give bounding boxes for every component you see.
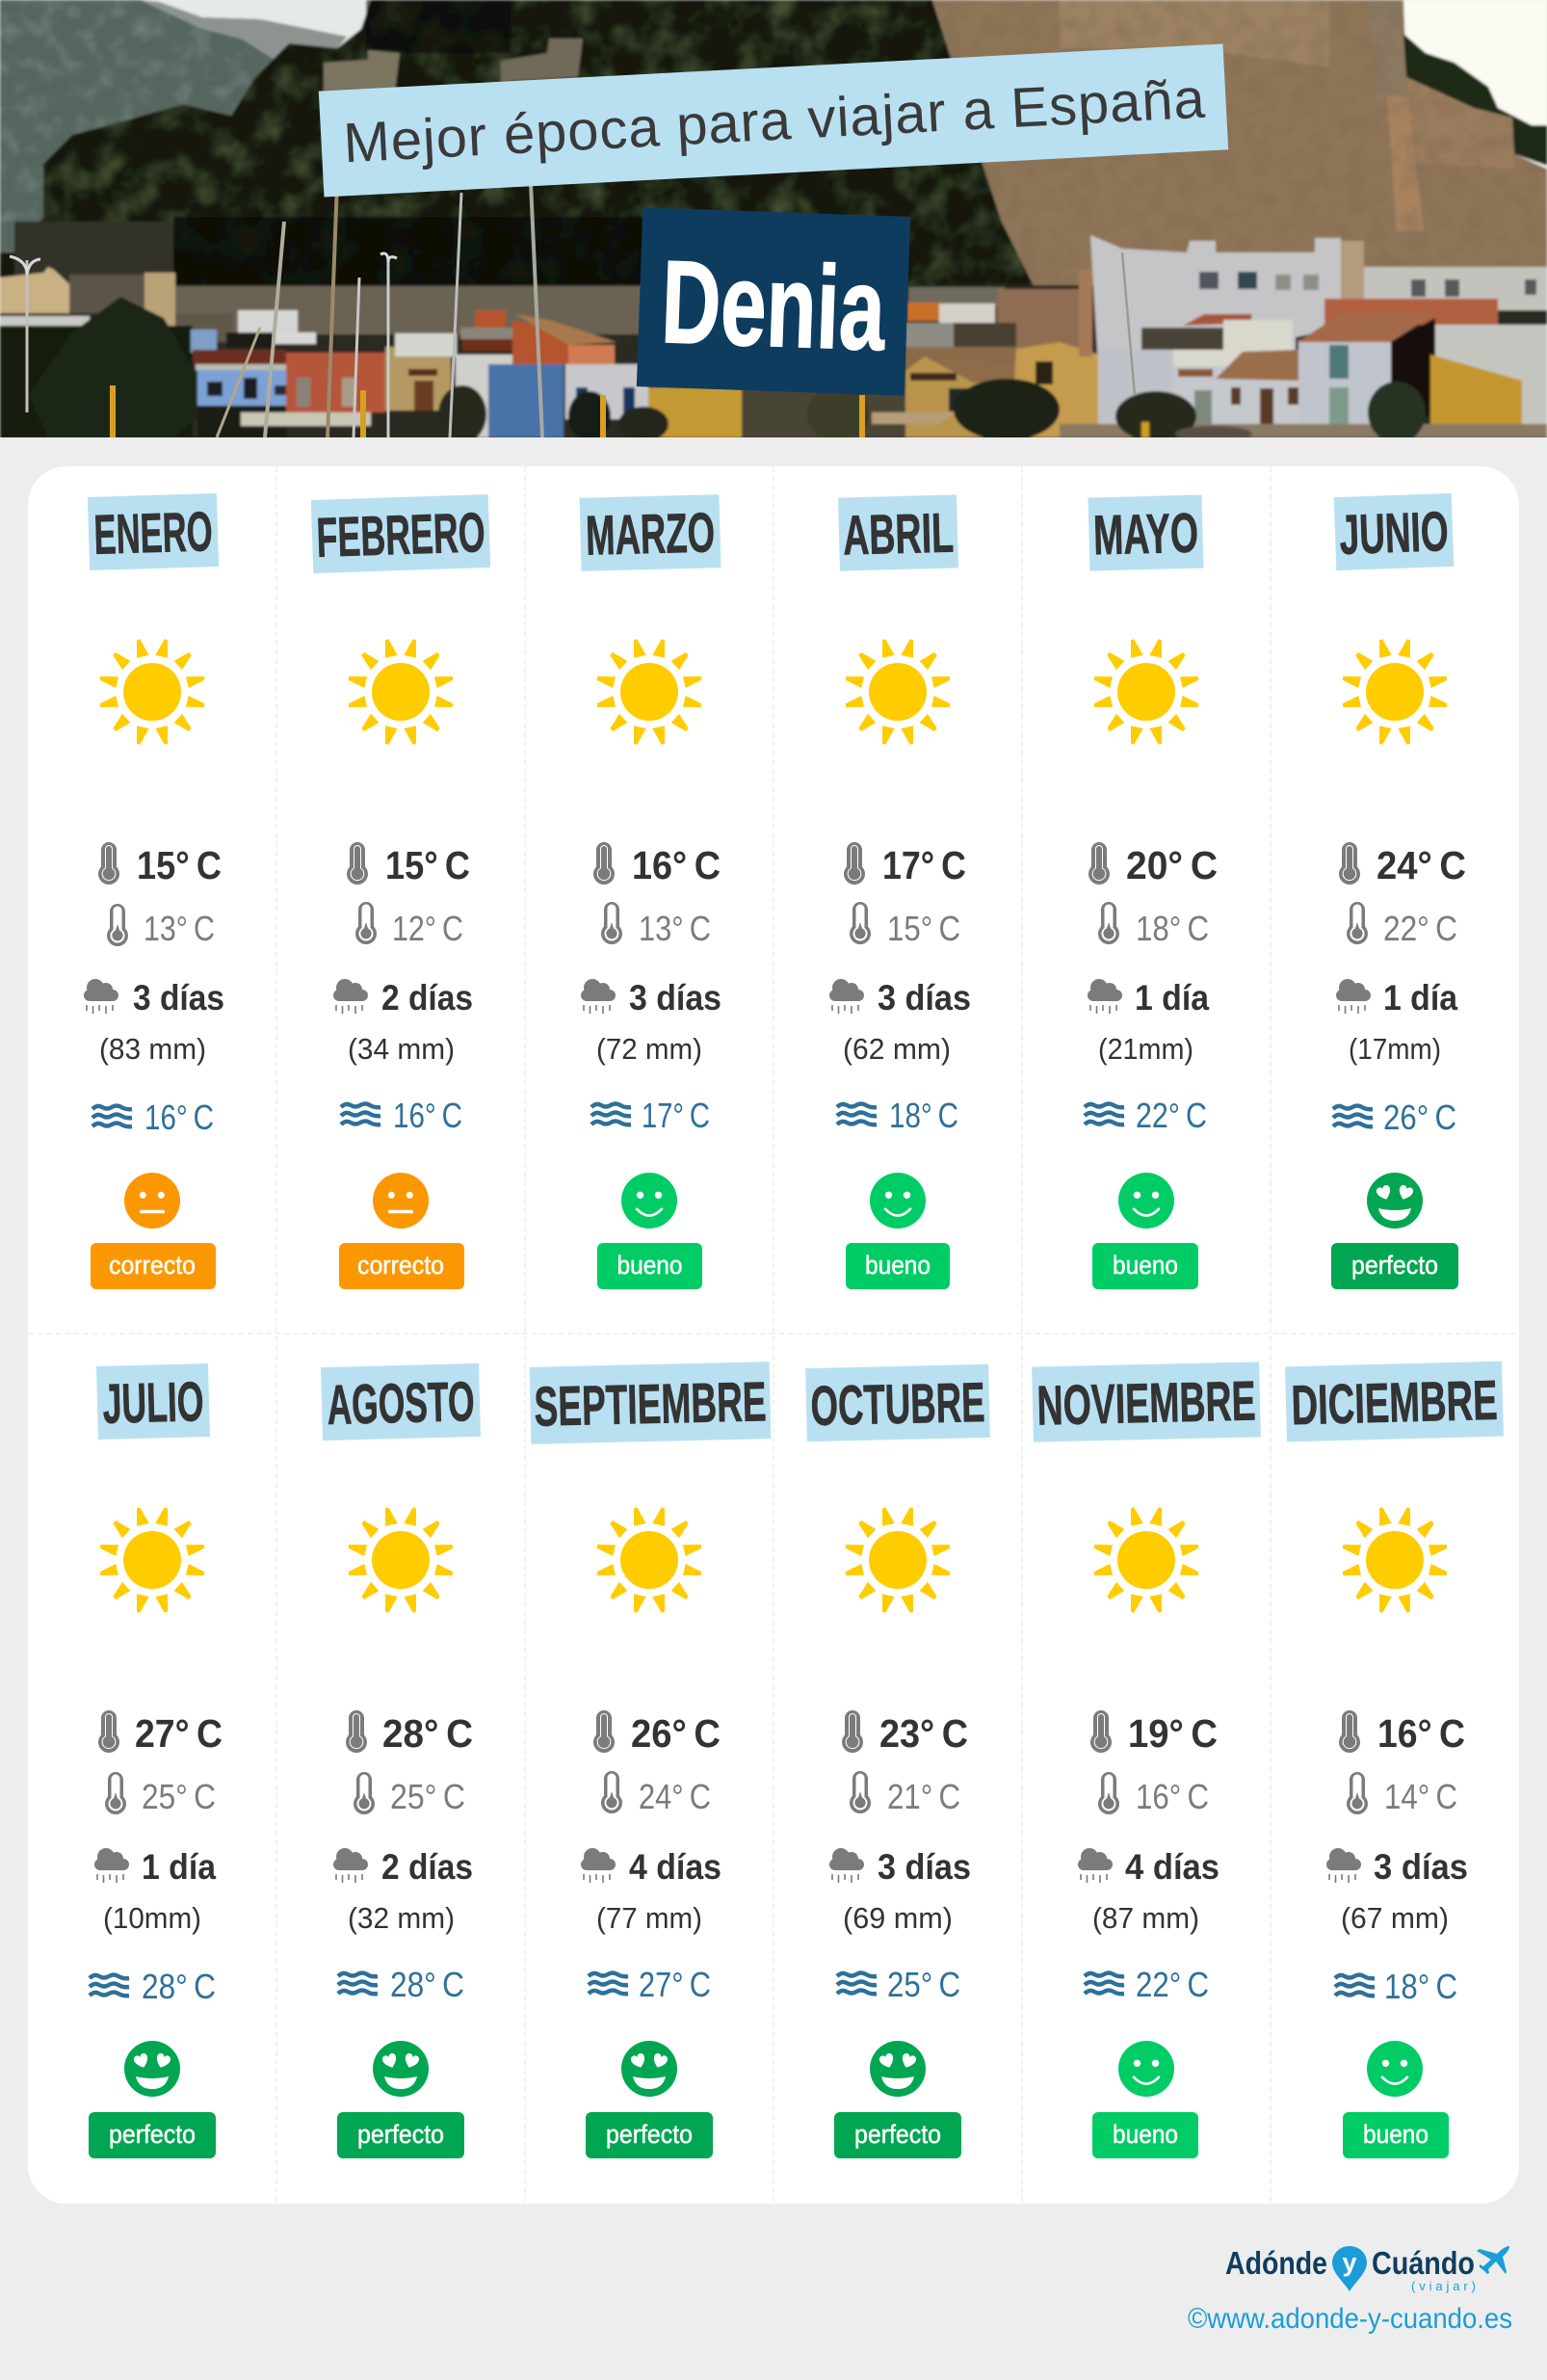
rating badge: bueno xyxy=(1113,1251,1178,1280)
harbour masts and lamp posts xyxy=(10,183,1135,437)
lower town base xyxy=(0,285,1547,439)
icon: rating face xyxy=(621,1173,677,1229)
city name: Denia xyxy=(660,236,888,375)
rating badge xyxy=(1331,1243,1458,1289)
minimum temperature: 18° C xyxy=(1136,909,1209,948)
minimum temperature xyxy=(850,1771,960,1816)
rating badge: bueno xyxy=(1113,2120,1178,2149)
rainy days xyxy=(1078,1847,1219,1887)
rainfall: (72 mm) xyxy=(596,1032,702,1066)
rainy days xyxy=(581,978,721,1018)
month heading: FEBRERO xyxy=(316,501,486,569)
minimum temperature: 24° C xyxy=(639,1777,711,1816)
rating badge: bueno xyxy=(616,1251,682,1280)
rating badge: perfecto xyxy=(1351,1251,1438,1280)
sea temperature: 28° C xyxy=(390,1965,464,2004)
minimum temperature xyxy=(107,904,215,948)
month heading: NOVIEMBRE xyxy=(1036,1369,1256,1438)
maximum temperature xyxy=(1339,1710,1465,1756)
rainfall: (32 mm) xyxy=(348,1901,455,1935)
rating badge xyxy=(339,1243,464,1289)
month heading: ABRIL xyxy=(842,502,955,567)
month: marzo xyxy=(580,494,721,1289)
rainy days xyxy=(84,978,224,1018)
icon: plane xyxy=(1477,2246,1509,2274)
maximum temperature: 26° C xyxy=(631,1711,721,1756)
minimum temperature xyxy=(1347,1772,1457,1816)
minimum temperature xyxy=(1098,902,1209,948)
rating badge: correcto xyxy=(109,1251,196,1280)
icon: sun xyxy=(100,639,204,745)
icon: sun xyxy=(1343,639,1447,745)
icon: sun xyxy=(846,1507,950,1613)
month: febrero xyxy=(311,494,490,1289)
rainy days: 3 días xyxy=(629,978,721,1018)
maximum temperature xyxy=(842,1710,968,1756)
sea temperature xyxy=(92,1097,214,1137)
sea temperature xyxy=(837,1096,958,1135)
month heading: JUNIO xyxy=(1338,500,1450,567)
sea temperature: 22° C xyxy=(1136,1096,1207,1135)
icon: rating face xyxy=(621,2041,677,2097)
rainfall: (77 mm) xyxy=(596,1901,702,1935)
month heading: ENERO xyxy=(93,500,213,567)
minimum temperature xyxy=(354,1772,465,1816)
minimum temperature: 21° C xyxy=(887,1777,960,1816)
minimum temperature: 13° C xyxy=(639,909,711,948)
rainfall: (67 mm) xyxy=(1341,1901,1449,1935)
icon: rating face xyxy=(1118,2041,1174,2097)
rating badge: bueno xyxy=(865,1251,931,1280)
rating badge xyxy=(89,2112,216,2158)
rating badge: perfecto xyxy=(357,2120,444,2149)
month heading xyxy=(96,1363,210,1440)
month heading xyxy=(311,494,490,573)
icon: rating face xyxy=(1367,1173,1423,1229)
town right of label xyxy=(907,303,939,321)
maximum temperature: 15° C xyxy=(137,843,222,887)
month: octubre xyxy=(805,1364,990,2158)
icon: sun xyxy=(1094,1507,1198,1613)
icon: rating face xyxy=(124,1173,180,1229)
minimum temperature xyxy=(601,1771,711,1816)
maximum temperature xyxy=(98,842,222,887)
rainy days: 3 días xyxy=(878,1847,971,1887)
maximum temperature xyxy=(844,842,966,887)
maximum temperature: 23° C xyxy=(879,1711,968,1756)
rainfall: (83 mm) xyxy=(99,1032,206,1066)
rating badge: correcto xyxy=(357,1251,444,1280)
sea temperature xyxy=(837,1965,960,2004)
sea temperature: 16° C xyxy=(144,1097,214,1137)
sea temperature xyxy=(90,1967,216,2006)
month heading xyxy=(321,1363,481,1441)
icon: rating face xyxy=(373,2041,429,2097)
panel: monthly climate table xyxy=(28,466,1519,2204)
rainy days xyxy=(829,1847,971,1887)
sea temperature xyxy=(1335,1967,1457,2006)
rainy days xyxy=(829,978,971,1018)
sea temperature: 26° C xyxy=(1383,1097,1456,1137)
icon: rating face xyxy=(373,1173,429,1229)
sea temperature xyxy=(1085,1096,1207,1135)
minimum temperature: 25° C xyxy=(142,1777,216,1816)
maximum temperature xyxy=(98,1710,223,1756)
minimum temperature xyxy=(1098,1772,1209,1816)
rainfall: (21mm) xyxy=(1098,1032,1193,1066)
maximum temperature xyxy=(346,1710,473,1756)
rainy days xyxy=(94,1847,216,1887)
rating badge xyxy=(834,2112,961,2158)
rainy days xyxy=(581,1847,721,1887)
rating badge: bueno xyxy=(1363,2120,1429,2149)
month: mayo xyxy=(1085,494,1218,1289)
rating badge xyxy=(337,2112,464,2158)
month heading xyxy=(530,1362,771,1444)
maximum temperature: 19° C xyxy=(1128,1711,1218,1756)
sea temperature xyxy=(1085,1965,1209,2004)
icon: location pin xyxy=(1332,2246,1367,2291)
month heading: JULIO xyxy=(102,1370,204,1436)
rainfall: (69 mm) xyxy=(843,1901,953,1935)
month: septiembre xyxy=(530,1362,771,2158)
rainy days: 3 días xyxy=(1374,1847,1468,1887)
rating badge xyxy=(1092,1243,1198,1289)
month: enero xyxy=(84,493,224,1289)
rainy days xyxy=(333,978,473,1018)
footer website: ©www.adonde-y-cuando.es xyxy=(1188,2303,1512,2335)
month: noviembre xyxy=(1032,1362,1261,2158)
maximum temperature xyxy=(1090,1710,1218,1756)
rainfall: (34 mm) xyxy=(348,1032,455,1066)
rainy days xyxy=(1088,978,1209,1018)
rating badge: perfecto xyxy=(854,2120,941,2149)
rainfall: (62 mm) xyxy=(843,1032,951,1066)
maximum temperature: 28° C xyxy=(382,1711,473,1756)
rating badge xyxy=(597,1243,702,1289)
icon: rating face xyxy=(870,1173,926,1229)
sea temperature: 16° C xyxy=(393,1096,462,1135)
rainy days: 4 días xyxy=(629,1847,721,1887)
sea temperature: 28° C xyxy=(142,1967,216,2006)
sea temperature: 22° C xyxy=(1136,1965,1209,2004)
icon: sun xyxy=(1094,639,1198,745)
maximum temperature xyxy=(347,842,470,887)
maximum temperature xyxy=(1088,842,1218,887)
month heading xyxy=(1088,494,1203,571)
maximum temperature: 15° C xyxy=(385,843,470,887)
month heading xyxy=(838,494,958,571)
footer logo: Adónde y Cuándo: Adónde xyxy=(1225,2245,1327,2281)
rating badge xyxy=(1092,2112,1198,2158)
icon: location pin: y xyxy=(1342,2248,1357,2277)
icon: sun xyxy=(349,1507,453,1613)
icon: rating face xyxy=(870,2041,926,2097)
rainy days: 2 días xyxy=(381,978,473,1018)
month: agosto xyxy=(321,1363,481,2158)
rainfall: (17mm) xyxy=(1349,1032,1441,1066)
rating badge xyxy=(1343,2112,1449,2158)
rainy days: 3 días xyxy=(878,978,971,1018)
rating badge: perfecto xyxy=(109,2120,196,2149)
sea temperature xyxy=(591,1096,710,1135)
maximum temperature xyxy=(593,1710,721,1756)
month heading: OCTUBRE xyxy=(810,1371,985,1438)
footer logo: Adónde y Cuándo xyxy=(1225,2245,1509,2293)
icon: sun xyxy=(846,639,950,745)
rating badge xyxy=(91,1243,216,1289)
sea temperature xyxy=(338,1965,464,2004)
month: diciembre xyxy=(1285,1362,1504,2158)
month heading xyxy=(1032,1362,1261,1442)
month heading xyxy=(88,493,219,570)
month heading: MAYO xyxy=(1092,502,1199,567)
city label: Denia xyxy=(637,207,910,396)
rainy days: 2 días xyxy=(381,1847,473,1887)
minimum temperature: 12° C xyxy=(392,909,463,948)
header photo: Denia castle and harbour xyxy=(0,0,1547,443)
rainy days: 3 días xyxy=(133,978,224,1018)
minimum temperature: 13° C xyxy=(144,909,215,948)
rainy days: 4 días xyxy=(1125,1847,1219,1887)
sea temperature xyxy=(589,1965,711,2004)
sea temperature xyxy=(1333,1097,1456,1137)
minimum temperature xyxy=(850,902,960,948)
icon: sun xyxy=(349,639,453,745)
icon: sun xyxy=(100,1507,204,1613)
minimum temperature xyxy=(105,1772,216,1816)
maximum temperature: 16° C xyxy=(1377,1711,1465,1756)
maximum temperature: 24° C xyxy=(1377,843,1466,887)
month: julio xyxy=(89,1363,223,2158)
month heading: AGOSTO xyxy=(327,1370,475,1437)
month heading: MARZO xyxy=(585,501,716,568)
rainy days: 1 día xyxy=(1383,978,1457,1018)
footer logo: Adónde y Cuándo: (viajar) xyxy=(1411,2279,1476,2293)
icon: rating face xyxy=(1367,2041,1423,2097)
icon: rating face xyxy=(124,2041,180,2097)
sea temperature: 27° C xyxy=(639,1965,711,2004)
title text: Mejor época para viajar a España xyxy=(342,67,1207,174)
rainfall: (10mm) xyxy=(103,1901,201,1935)
minimum temperature: 14° C xyxy=(1384,1777,1457,1816)
icon: rating face xyxy=(1118,1173,1174,1229)
rating badge: perfecto xyxy=(606,2120,693,2149)
sea temperature: 17° C xyxy=(642,1096,710,1135)
icon: sun xyxy=(597,1507,701,1613)
minimum temperature: 25° C xyxy=(390,1777,465,1816)
maximum temperature xyxy=(593,842,721,887)
minimum temperature xyxy=(601,902,711,948)
sea temperature: 18° C xyxy=(889,1096,958,1135)
rainy days xyxy=(333,1847,473,1887)
rating badge xyxy=(586,2112,713,2158)
month heading: SEPTIEMBRE xyxy=(534,1370,767,1439)
maximum temperature: 17° C xyxy=(882,843,966,887)
rating badge xyxy=(846,1243,950,1289)
title band xyxy=(319,43,1228,198)
rainfall: (87 mm) xyxy=(1092,1901,1199,1935)
maximum temperature: 27° C xyxy=(135,1711,223,1756)
footer logo: Adónde y Cuándo: Cuándo xyxy=(1372,2245,1475,2281)
sea temperature: 18° C xyxy=(1384,1967,1457,2006)
sea temperature: 25° C xyxy=(887,1965,960,2004)
month: abril xyxy=(829,494,971,1289)
month: junio xyxy=(1331,493,1466,1289)
rainy days xyxy=(1326,1847,1468,1887)
rainy days xyxy=(1336,978,1457,1018)
icon: sun xyxy=(597,639,701,745)
minimum temperature xyxy=(1347,902,1457,948)
month heading xyxy=(1334,493,1454,570)
icon: sun xyxy=(1343,1507,1447,1613)
month heading xyxy=(580,494,721,571)
minimum temperature: 15° C xyxy=(887,909,960,948)
rainy days: 1 día xyxy=(142,1847,216,1887)
month heading xyxy=(805,1364,990,1441)
maximum temperature: 16° C xyxy=(632,843,721,887)
minimum temperature: 16° C xyxy=(1136,1777,1209,1816)
maximum temperature xyxy=(1339,842,1466,887)
maximum temperature: 20° C xyxy=(1126,843,1218,887)
sea temperature xyxy=(341,1096,462,1135)
rainy days: 1 día xyxy=(1135,978,1209,1018)
minimum temperature xyxy=(355,902,463,948)
minimum temperature: 22° C xyxy=(1383,909,1457,948)
